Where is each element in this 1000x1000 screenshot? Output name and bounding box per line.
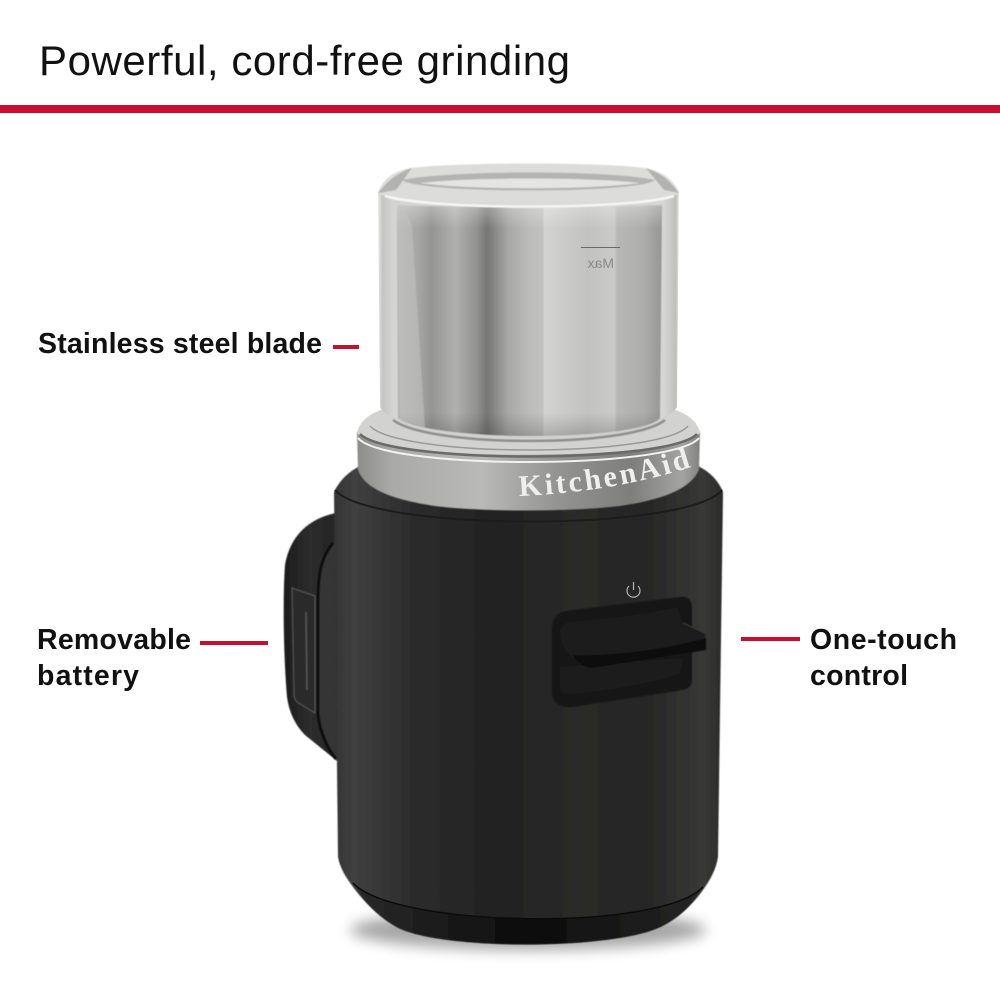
power symbol: [627, 582, 640, 597]
header rule: [0, 105, 1000, 113]
steel cup: [397, 205, 662, 436]
callout: one-touch control: control: [810, 660, 908, 692]
max fill mark: [581, 247, 620, 271]
body rim: [335, 490, 722, 522]
lid: [378, 164, 679, 206]
battery pack: [284, 513, 345, 761]
title: Powerful, cord-free grinding: [39, 37, 570, 84]
brand logo: KitchenAid: [518, 448, 691, 496]
max fill mark: Max: [588, 255, 614, 271]
motor body: [334, 466, 723, 944]
glass jar: [378, 193, 679, 433]
floor shadow: [350, 910, 706, 950]
glass highlight: [397, 212, 425, 428]
callout: one-touch control: [741, 624, 957, 692]
callout: removable battery: Removable: [37, 624, 191, 656]
callout: one-touch control: One-touch: [810, 624, 957, 656]
one-touch switch: [552, 597, 706, 707]
callout: removable battery: [37, 624, 268, 692]
metal collar: [357, 432, 700, 510]
callout: removable battery: battery: [37, 660, 139, 692]
product: coffee grinder: [282, 163, 724, 958]
base: [353, 883, 703, 944]
callout: stainless steel blade: Stainless steel blade: [38, 328, 322, 360]
